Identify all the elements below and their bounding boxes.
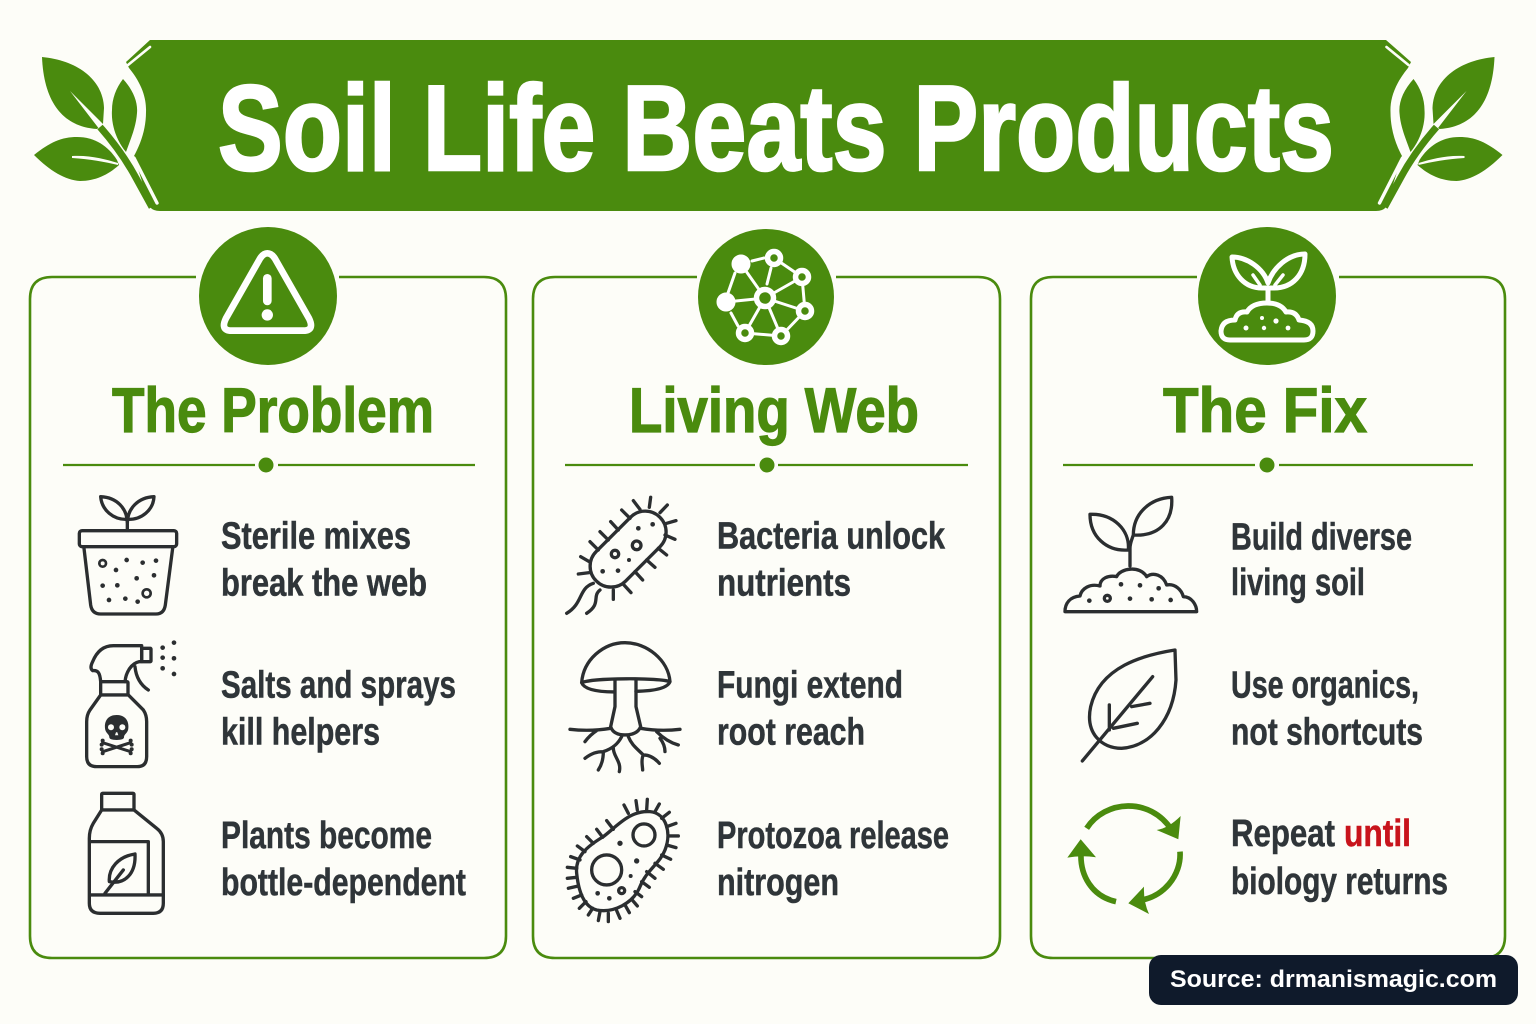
icon: leaf [1082, 650, 1176, 761]
text: build soil [1231, 516, 1412, 604]
icon: plant pot [79, 497, 177, 614]
heading: the fix: The Fix [1163, 376, 1367, 446]
text: build soil: Build diverse [1231, 516, 1412, 558]
heading: the problem: The Problem [112, 376, 434, 446]
text: sterile mixes: Sterile mixes [221, 516, 411, 558]
icon: recycle arrows [1067, 806, 1181, 914]
icon: sprout badge [1198, 227, 1336, 365]
icon: bacteria [567, 497, 676, 613]
panel: the problem [30, 227, 506, 958]
text: salts and sprays: kill helpers [221, 712, 380, 754]
text: repeat until [1231, 813, 1448, 903]
icon: sprout in soil [1065, 497, 1197, 612]
panel: the fix [1031, 227, 1505, 958]
icon: spray bottle [87, 640, 176, 767]
heading: living web: Living Web [629, 376, 919, 446]
text: bacteria [717, 516, 946, 604]
text: salts and sprays [221, 664, 456, 754]
text: plants become: Plants become [221, 815, 432, 857]
icon: warning badge [199, 227, 337, 365]
text: sterile mixes [221, 516, 427, 604]
text: use organics [1231, 664, 1423, 754]
text: bacteria: nutrients [717, 562, 851, 604]
icon: mushroom with roots [570, 643, 680, 772]
left leaf ornament [34, 57, 157, 207]
icon: fertilizer jug [89, 793, 163, 913]
text: plants become [221, 815, 466, 904]
text: use organics: not shortcuts [1231, 712, 1423, 754]
text: protozoa: nitrogen [717, 862, 839, 904]
text: build soil: living soil [1231, 562, 1365, 604]
text: protozoa: Protozoa release [717, 815, 949, 857]
text: fungi [717, 664, 903, 754]
text: sterile mixes: break the web [221, 562, 427, 604]
icon: network badge [698, 229, 834, 365]
text: fungi: Fungi extend [717, 664, 903, 706]
panel: living web [533, 229, 1000, 958]
icon: protozoa [567, 799, 678, 922]
text: use organics: Use organics, [1231, 664, 1419, 706]
text: repeat until: biology returns [1231, 861, 1448, 903]
source badge: Source: drmanismagic.com [1170, 966, 1497, 993]
source badge [1149, 955, 1518, 1005]
text: bacteria: Bacteria unlock [717, 516, 946, 558]
text: fungi: root reach [717, 712, 865, 754]
title banner [126, 40, 1411, 211]
text: plants become: bottle-dependent [221, 862, 466, 904]
right leaf ornament [1380, 57, 1502, 207]
text: salts and sprays: Salts and sprays [221, 664, 456, 706]
text: repeat until: Repeat [1231, 813, 1335, 855]
text: repeat until: until [1344, 813, 1411, 855]
text: protozoa [717, 815, 949, 904]
